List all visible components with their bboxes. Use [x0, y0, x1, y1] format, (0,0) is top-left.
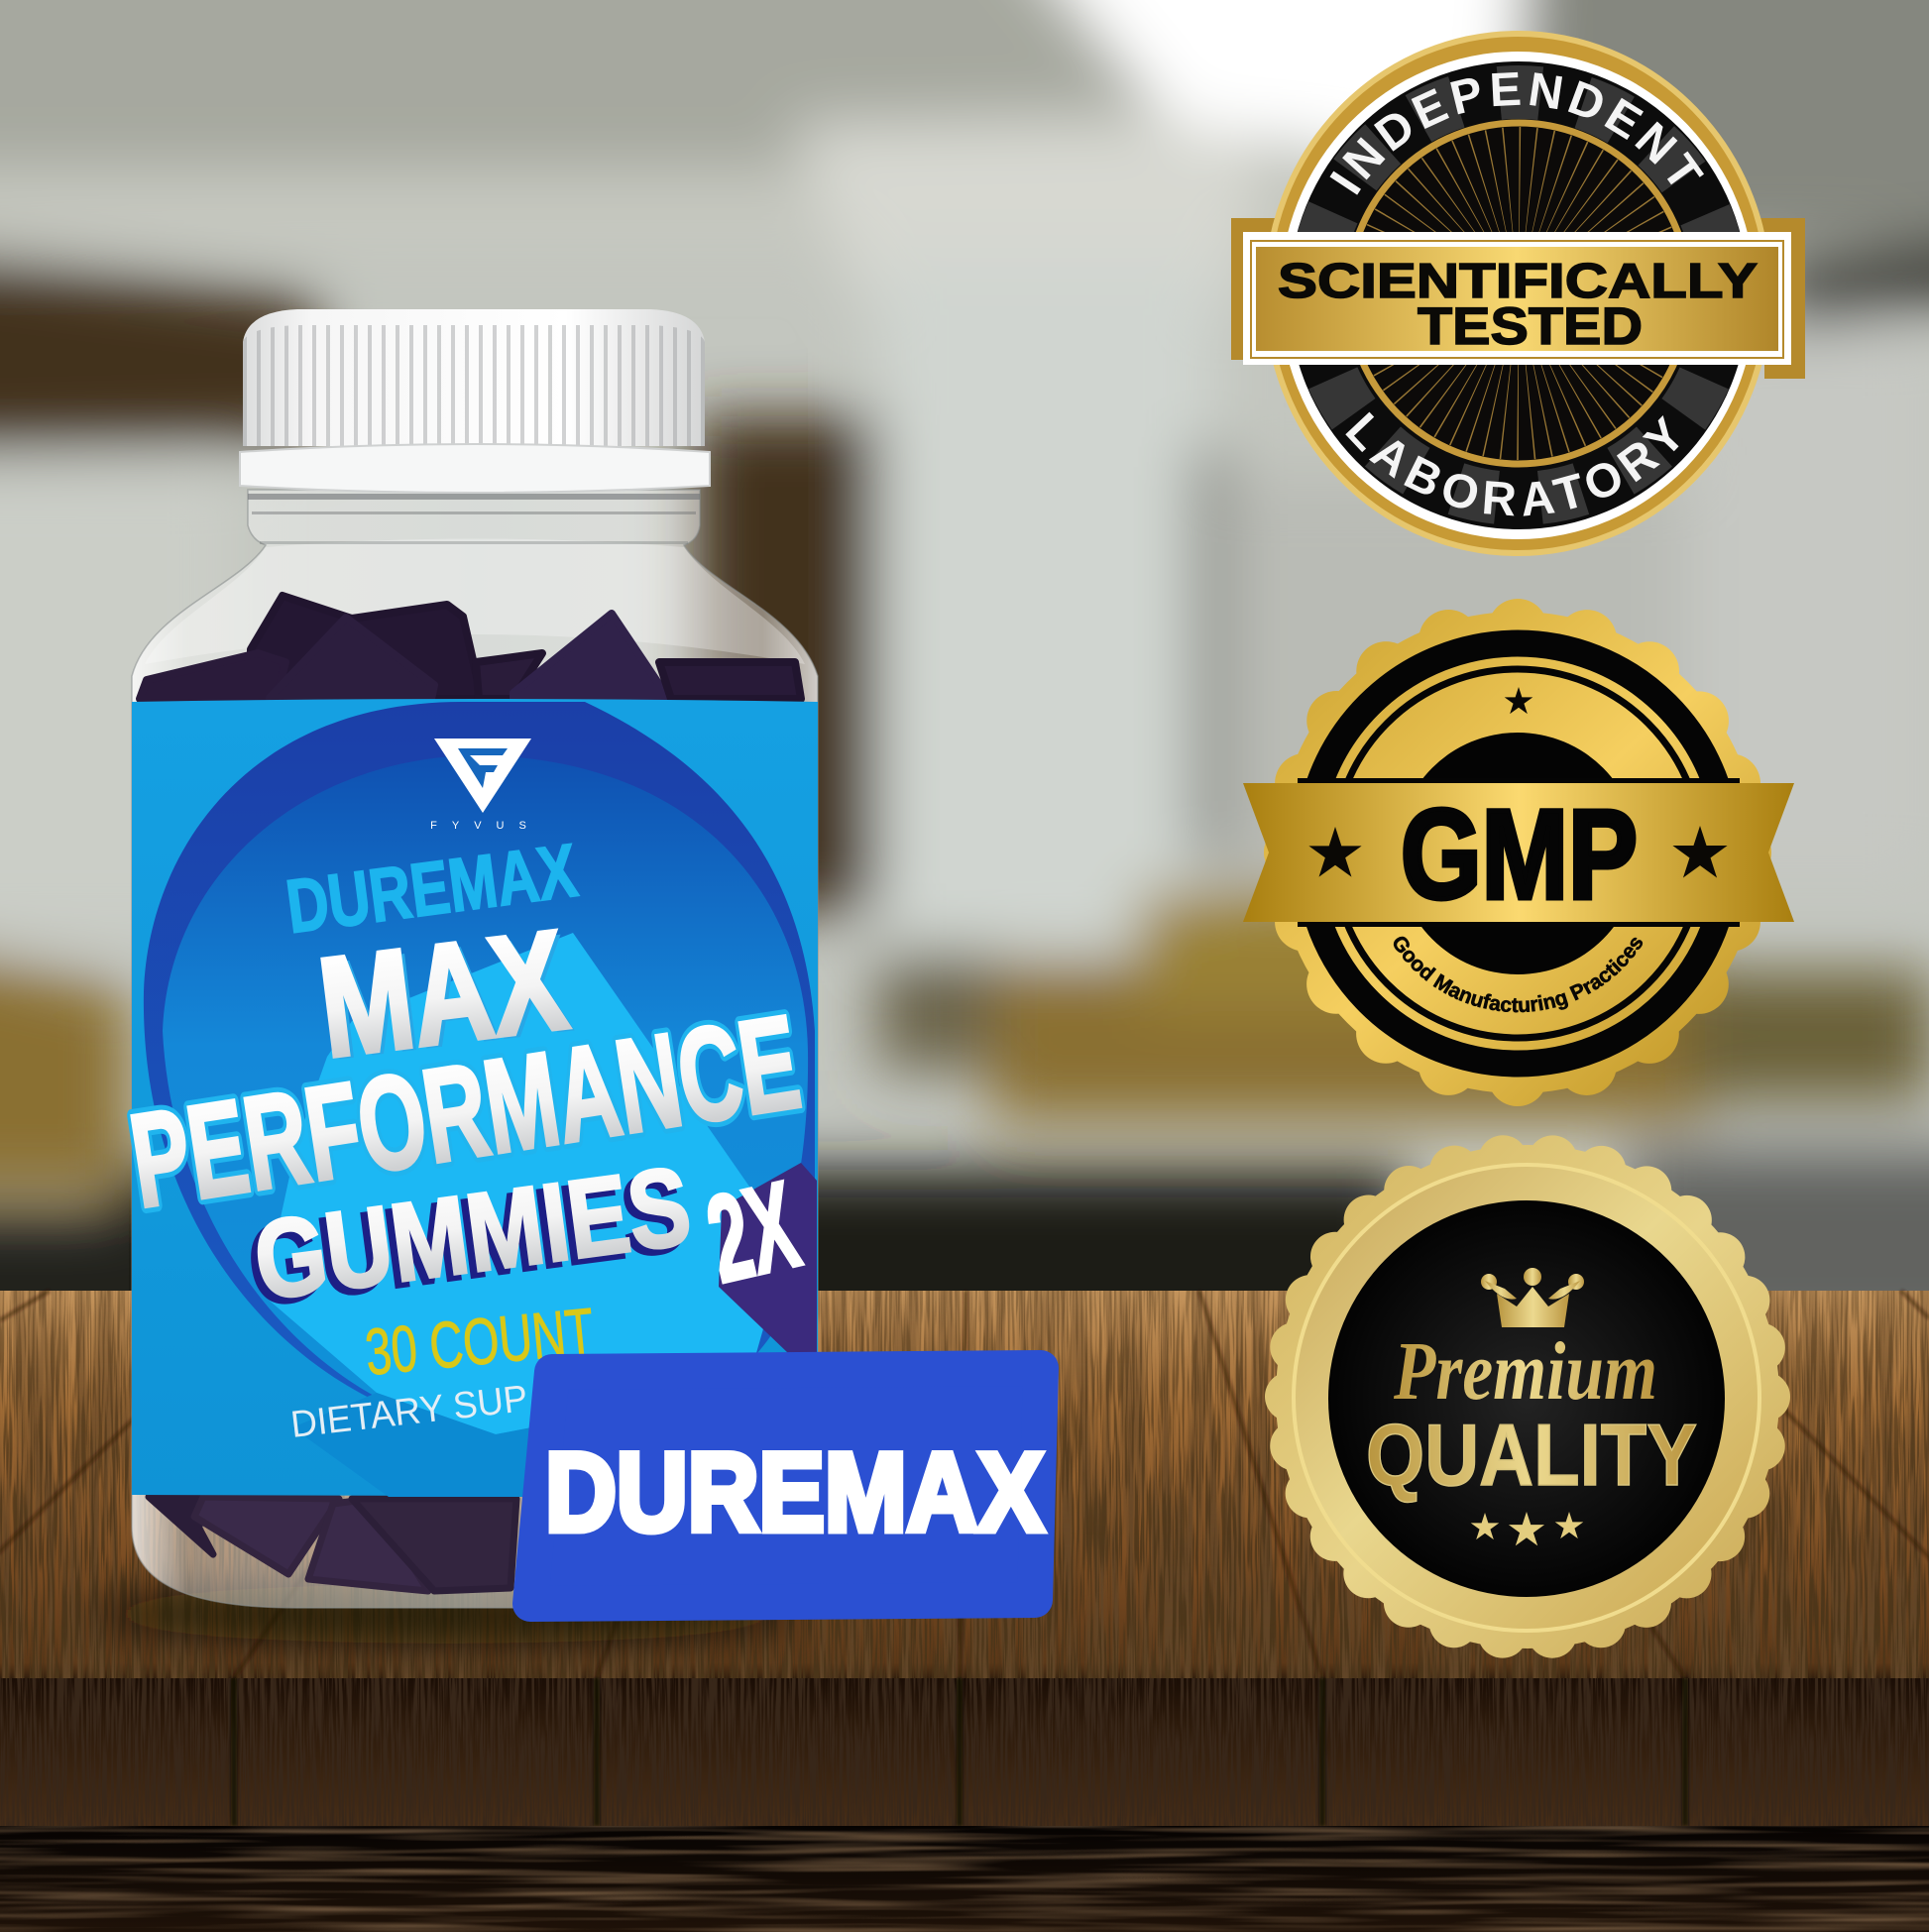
sunburst centre [1348, 123, 1689, 464]
label dark blob [144, 702, 815, 1437]
card wordmark: DUREMAX [545, 1430, 1044, 1554]
gold ribbon [1243, 783, 1794, 922]
scalloped gold seal [1276, 1145, 1779, 1648]
curved caption: Good Manufacturing Practices [1394, 936, 1644, 1013]
dietary supplement text: DIETARY SUP [288, 1378, 529, 1446]
brand logo: FYVUS [430, 820, 541, 832]
top star [1505, 687, 1532, 714]
bottle neck threads [248, 494, 700, 544]
blue brand card [530, 1368, 1044, 1604]
table lower band [0, 1826, 1929, 1932]
brand logo [430, 739, 541, 832]
black ring [1289, 61, 1749, 529]
ribbon tail [1231, 218, 1805, 379]
badge: GMP [1243, 599, 1794, 1106]
outer gold ring [1267, 34, 1768, 553]
shoulder highlight [145, 539, 805, 664]
table front face [0, 1678, 1929, 1826]
30 count: 30 COUNT [362, 1294, 597, 1389]
three stars [1471, 1512, 1583, 1545]
headline PERFORMANCE [122, 988, 809, 1236]
bottle shadow [89, 1584, 803, 1644]
2X badge text: 2X [696, 1156, 810, 1308]
ribbon stars [1308, 826, 1728, 877]
product label [122, 699, 818, 1497]
wooden table [0, 1291, 1929, 1932]
headline MAX: MAX [317, 904, 579, 1090]
GMP lettering: GMP [1401, 784, 1638, 926]
inner black disc [1397, 733, 1639, 974]
ribbon edge shadows [1298, 778, 1740, 927]
headline GUMMIES: GUMMIES [242, 1149, 691, 1329]
premium script: Premium [1393, 1325, 1657, 1418]
badge: scientifically tested [1231, 31, 1805, 556]
scalloped gold seal [1277, 612, 1759, 1093]
black centre [1328, 1200, 1725, 1597]
band text: SCIENTIFICALLY [1278, 255, 1758, 308]
purple corner [719, 1163, 817, 1353]
central band: TESTED [1418, 297, 1643, 356]
label background [132, 699, 818, 1497]
brand name: DUREMAX [282, 829, 582, 950]
headline PERFORMANCE: PERFORMANCE [122, 988, 809, 1236]
table top surface [0, 1291, 1929, 1678]
inner gold ring [1294, 1165, 1759, 1631]
black rings [1307, 643, 1728, 1064]
gummies above label [140, 596, 801, 699]
label inner blob [163, 755, 808, 1437]
headline MAX: MAX [311, 901, 574, 1087]
icon: crown [1481, 1268, 1584, 1327]
cap [240, 309, 710, 493]
ring text top: INDEPENDENT [1330, 71, 1704, 195]
lower shadow strip [292, 1393, 634, 1497]
glass jar [132, 490, 818, 1608]
blurred room background [0, 0, 1929, 1388]
headline PERFORMANCE: PERFORMANCE [122, 988, 809, 1236]
badge: premium quality [1276, 1145, 1779, 1648]
quality word: QUALITY [1366, 1406, 1697, 1504]
long cyan shadow [264, 933, 788, 1434]
supplement bottle [122, 309, 818, 1608]
headline GUMMIES: GUMMIES [248, 1143, 697, 1323]
gummies below label [149, 1497, 516, 1591]
central band [1243, 232, 1791, 365]
ring text bottom: LABORATORY [1345, 412, 1679, 516]
